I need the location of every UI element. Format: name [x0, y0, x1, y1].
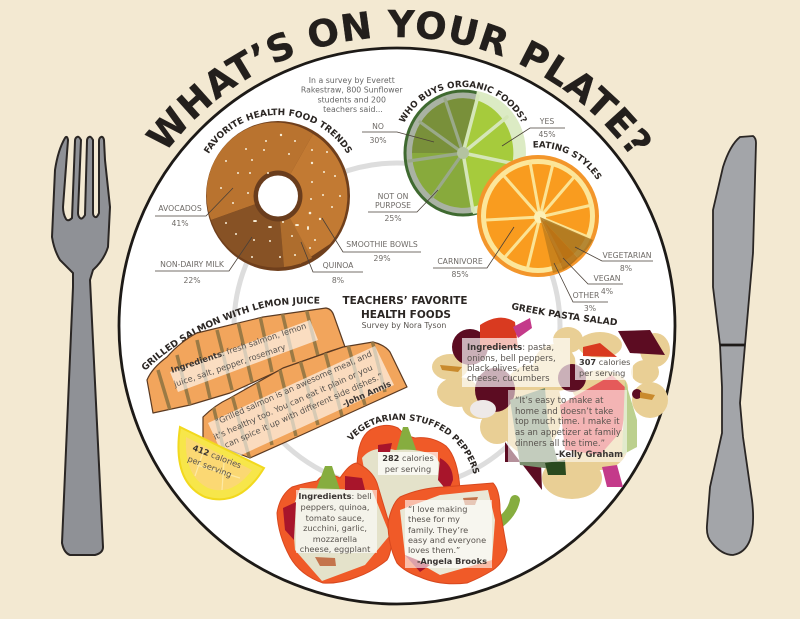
illustration: salmon fillet top	[147, 308, 345, 413]
label: avocados 41%	[155, 188, 233, 228]
text: pasta calories: per serving	[579, 368, 625, 378]
label: smoothie bowls 29%: SMOOTHIE BOWLS	[346, 240, 418, 249]
illustration: left pepper	[277, 463, 392, 583]
text: pepper quote: these for my	[408, 514, 460, 524]
text: pasta ingredients: Ingredients: pasta,	[467, 343, 554, 353]
label: yes 45%: YES	[539, 117, 554, 126]
label: no 30%: 30%	[369, 136, 387, 145]
text: pepper calories: 282 calories	[382, 453, 434, 463]
text: pepper calories: per serving	[385, 464, 431, 474]
label: vegan 4%: 4%	[601, 287, 613, 296]
icon: knife	[707, 136, 756, 555]
heading: grilled salmon with lemon juice: GRILLED SALMON WITH LEMON JUICE	[142, 296, 320, 370]
label: quinoa 8%	[301, 242, 363, 285]
label: non-dairy milk 22%: 22%	[183, 276, 201, 285]
text: pasta calories	[575, 357, 633, 380]
label: other 3%: OTHER	[573, 291, 600, 300]
panel: grilled salmon with lemon juice	[142, 296, 408, 500]
illustration: lemon wedge with calories: 412 calories	[191, 443, 243, 470]
panel: eating styles	[433, 141, 653, 313]
heading: vegetarian stuffed peppers: VEGETARIAN STUFFED PEPPERS	[346, 414, 480, 474]
label: no 30%	[362, 122, 434, 145]
text: pasta ingredients	[462, 338, 570, 387]
text: pepper ingredients: cheese, eggplant	[300, 544, 371, 554]
title: WHAT’S ON YOUR PLATE?	[144, 10, 651, 152]
text: pepper ingredients: mozzarella	[313, 534, 357, 544]
plate	[119, 48, 675, 604]
text: salmon quote: it’s healthy too. You can eat it plain or you	[212, 362, 374, 442]
heading: favorite health food trends: FAVORITE HEALTH FOOD TRENDS	[204, 108, 352, 154]
text: pasta quote: dinners all the time.”	[515, 439, 605, 449]
label: other 3%	[554, 263, 608, 313]
text: pepper quote: -Angela Brooks	[417, 556, 487, 566]
label: smoothie bowls 29%: 29%	[373, 254, 391, 263]
text: pasta ingredients: onions, bell peppers,	[467, 354, 556, 364]
text: salmon ingredients: Ingredients: fresh salmon, lemon	[169, 321, 307, 375]
label: vegetarian 8%: VEGETARIAN	[603, 251, 651, 260]
label: not on purpose 25%: NOT ON	[378, 192, 408, 201]
text: salmon ingredients: juice, salt, pepper, rosemary	[171, 342, 287, 389]
text: pepper quote	[405, 500, 492, 568]
label: non-dairy milk 22%: NON-DAIRY MILK	[160, 260, 225, 269]
text: pasta quote	[508, 390, 627, 462]
text: pasta quote: top much time. I make it	[515, 417, 620, 427]
heading: eating styles: EATING STYLES	[533, 141, 602, 180]
illustration: lemon wedge with calories: per serving	[186, 454, 233, 479]
label: yes 45%	[502, 117, 565, 146]
text: pepper ingredients: Ingredients: bell	[298, 491, 372, 501]
label: avocados 41%: 41%	[171, 219, 189, 228]
icon: bagel pie chart	[206, 121, 350, 271]
panel: greek pasta salad	[432, 303, 670, 499]
label: carnivore 85%	[433, 227, 514, 279]
text: pepper calories	[378, 452, 438, 475]
illustration: pasta salad	[432, 318, 670, 499]
text: pepper quote: easy and everyone	[408, 535, 486, 545]
panel: vegetarian stuffed peppers	[276, 414, 520, 584]
label: not on purpose 25%: 25%	[384, 214, 402, 223]
label: avocados 41%: AVOCADOS	[158, 204, 202, 213]
illustration: back pepper	[357, 425, 460, 540]
text: salmon quote: “Grilled salmon is an awesome meal, and	[214, 348, 373, 427]
text: pasta quote: “It’s easy to make at	[515, 396, 604, 406]
heading: teachers' favorite health foods: HEALTH FOODS	[361, 309, 451, 321]
label: carnivore 85%: CARNIVORE	[437, 257, 483, 266]
survey intro text: students and 200	[318, 96, 386, 104]
heading: greek pasta salad: GREEK PASTA SALAD	[512, 303, 617, 325]
illustration: right pepper	[388, 483, 515, 584]
illustration: salmon fillet bottom	[203, 340, 407, 460]
text: pepper ingredients: tomato sauce,	[306, 513, 364, 523]
text: pepper ingredients	[296, 490, 377, 554]
text: salmon quote: -John Annis	[341, 378, 393, 409]
label: quinoa 8%: QUINOA	[323, 261, 354, 270]
text: pasta quote: -Kelly Graham	[555, 450, 623, 460]
text: pepper ingredients: zucchini, garlic,	[303, 523, 367, 533]
label: carnivore 85%: 85%	[451, 270, 469, 279]
text: pasta quote: as an appetizer at family	[515, 428, 621, 438]
label: vegan 4%: VEGAN	[593, 274, 621, 283]
icon: fork	[52, 137, 110, 555]
heading: teachers' favorite health foods: TEACHERS’ FAVORITE	[342, 295, 468, 307]
panel: who buys organic foods	[362, 80, 565, 223]
label: quinoa 8%: 8%	[332, 276, 344, 285]
label: not on purpose 25%	[368, 190, 438, 223]
label: smoothie bowls 29%	[322, 218, 421, 263]
plate inner ring	[234, 163, 560, 489]
heading: teachers' favorite health foods: Survey by Nora Tyson	[362, 321, 446, 330]
label: not on purpose 25%: PURPOSE	[375, 201, 411, 210]
illustration: lemon wedge with calories	[178, 427, 264, 499]
text: pepper quote: “I love making	[408, 504, 467, 514]
text: pasta ingredients: black olives, feta	[467, 364, 539, 374]
text: pepper ingredients: peppers, quinoa,	[301, 502, 369, 512]
survey intro text: Rakestraw, 800 Sunflower	[301, 86, 403, 94]
label: vegetarian 8%	[575, 247, 653, 273]
label: yes 45%: 45%	[538, 130, 556, 139]
heading: who buys organic foods: WHO BUYS ORGANIC FOODS?	[398, 80, 527, 122]
icon: lime pie chart	[405, 91, 526, 215]
label: other 3%: 3%	[584, 304, 596, 313]
text: pepper quote: loves them.”	[408, 545, 460, 555]
label: vegan 4%	[563, 258, 623, 296]
text: pepper quote: family. They’re	[408, 525, 468, 535]
text: salmon quote	[208, 346, 394, 462]
label: no 30%: NO	[372, 122, 384, 131]
heading: teachers' favorite health foods	[342, 295, 468, 330]
icon: orange pie chart	[477, 155, 599, 277]
survey intro text: teachers said...	[323, 105, 383, 114]
panel: favorite health food trends	[155, 108, 421, 285]
label: non-dairy milk 22%	[155, 237, 252, 285]
text: pasta ingredients: cheese, cucumbers	[467, 374, 550, 384]
text: pasta quote: home and doesn’t take	[515, 407, 613, 417]
text: salmon quote: can spice it up with different side dishes.”	[223, 371, 384, 450]
text: pasta calories: 307 calories	[579, 357, 630, 367]
survey intro text: In a survey by Everett	[309, 76, 395, 85]
label: vegetarian 8%: 8%	[620, 264, 632, 273]
